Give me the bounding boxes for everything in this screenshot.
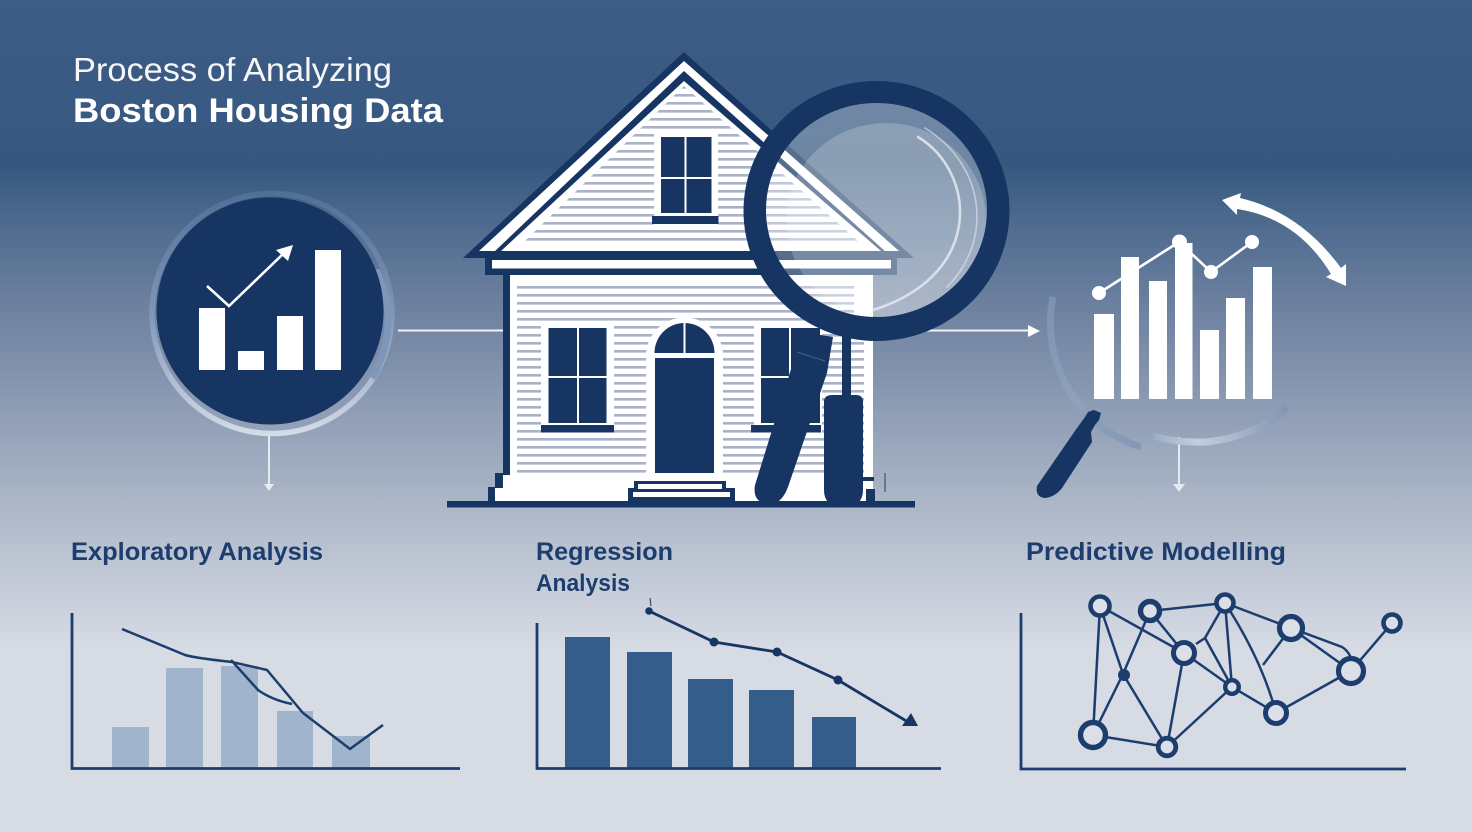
title: [73, 51, 444, 130]
axes: [72, 613, 460, 768]
magnifier arc: [1050, 297, 1287, 447]
lens highlights: [873, 128, 977, 310]
regression line: [645, 598, 918, 726]
white bars: [1094, 243, 1272, 399]
network nodes: [1080, 594, 1400, 756]
badge disc: [156, 198, 384, 424]
badge bars: [199, 250, 341, 370]
heading: [536, 538, 673, 597]
badge ring: [152, 194, 392, 434]
connector arrows: [264, 325, 1185, 492]
door steps: [628, 481, 735, 501]
lens ring: [744, 81, 1010, 341]
title line 1: Process of Analyzing: [73, 51, 392, 88]
panel: predictive modelling: [1021, 538, 1406, 769]
ground line: [447, 501, 915, 508]
heading: Analysis: [536, 570, 630, 597]
cylinder handle: [824, 395, 863, 507]
panel: exploratory analysis: [71, 538, 460, 768]
badge trend arrow: [207, 245, 293, 306]
door: [646, 318, 723, 476]
predictive modelling icon: [1037, 193, 1346, 498]
network edges: [1093, 603, 1392, 747]
bars: [565, 637, 856, 768]
heading: Predictive Modelling: [1026, 538, 1286, 566]
bars: [112, 666, 370, 768]
left window: [541, 322, 614, 433]
panel: regression analysis: [536, 538, 941, 768]
axes: [537, 623, 941, 768]
trend line: [1092, 234, 1259, 300]
lens: [766, 102, 988, 318]
gable siding: [525, 86, 858, 241]
title line 2: Boston Housing Data: [73, 92, 444, 130]
handle highlight: [797, 352, 825, 361]
heading: Exploratory Analysis: [71, 538, 323, 566]
double arrow: [1222, 193, 1346, 286]
eave band: [485, 252, 897, 275]
vertical post: [842, 335, 851, 399]
heading: Regression: [536, 538, 673, 566]
badge ring segment: [372, 270, 388, 378]
small magnifier handle: [1037, 410, 1101, 498]
right window: [751, 322, 822, 433]
magnifying glass: [744, 81, 1010, 507]
house illustration: [447, 52, 915, 508]
axes: [1021, 613, 1406, 769]
icon: exploratory analysis badge: [152, 194, 392, 434]
roof: [463, 52, 914, 258]
angled handle: [755, 333, 833, 504]
house body: [488, 275, 873, 501]
trend lines: [122, 629, 383, 749]
gable window: [652, 130, 718, 226]
downspout detail: [860, 473, 886, 502]
